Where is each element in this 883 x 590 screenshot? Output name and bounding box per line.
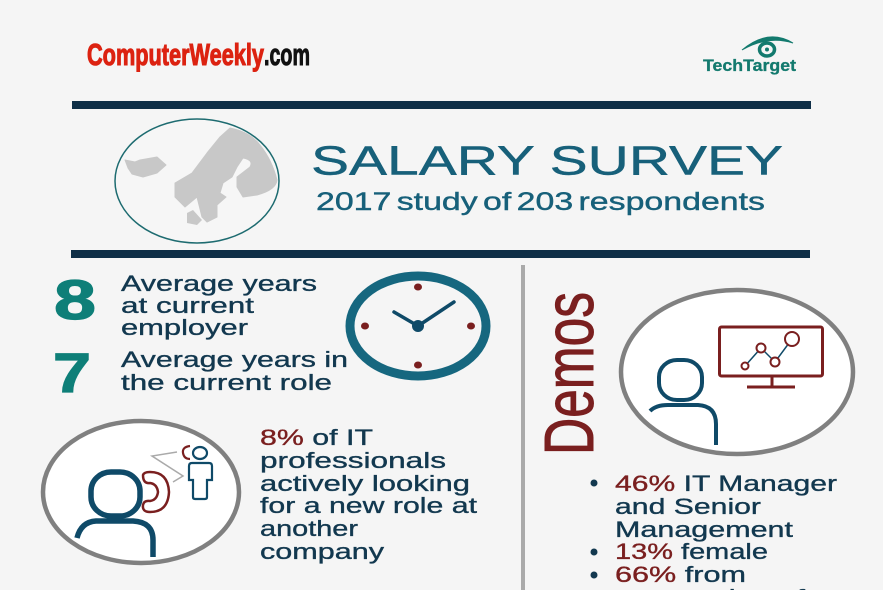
list: demographics: 13% female [615,539,768,564]
text: job-seeking statistic: professionals [260,448,446,473]
stat: years at current employer: Average years [121,271,317,296]
list: demographics: and Senior [615,494,762,519]
list: demographics [590,471,838,590]
logo: TechTarget: TechTarget [703,57,797,75]
list: demographics: 46% IT Manager [615,471,838,496]
text: job-seeking statistic: another [260,516,359,541]
subtitle: 2017 study of 203 respondents [316,188,765,216]
stat: years in current role: Average years in [121,347,348,372]
stat: years at current employer: employer [121,315,249,340]
text: job-seeking statistic: for a new role at [260,493,478,518]
icon: people on phone [43,421,239,563]
icon: Nordic map in circle [115,119,279,243]
stat: years in current role: the current role [121,370,332,395]
heading: Demos: Demos [530,292,608,455]
text: job-seeking statistic [260,425,478,564]
title: SALARY SURVEY [311,138,783,184]
stat: years at current employer [54,268,317,340]
list: demographics: 66% from [615,562,746,587]
icon: clock [350,276,486,376]
stat: years at current employer: 8 [54,268,96,331]
logo: ComputerWeekly.com: ComputerWeekly [87,37,265,72]
list: demographics: Management [615,517,794,542]
logo: ComputerWeekly.com: .com [264,37,310,72]
text: job-seeking statistic: actively looking [260,471,470,496]
text: job-seeking statistic: company [260,539,385,564]
logo: TechTarget [703,37,797,75]
stat: years in current role: 7 [53,341,91,404]
text: job-seeking statistic: 8% of IT [260,425,373,450]
stat: years at current employer: at current [121,293,255,318]
stat: years in current role [53,341,348,404]
icon: person with chart monitor [621,290,853,454]
